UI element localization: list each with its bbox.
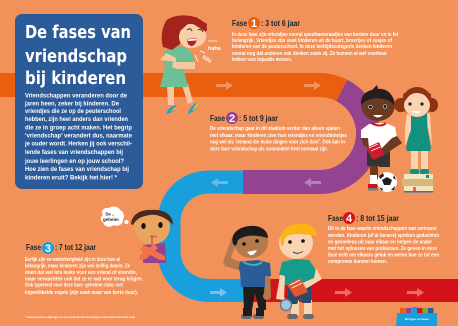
body: fase 4: worden. Kinderen (of al tieners) spreken gedachten (327, 233, 439, 239)
body: fase 3: Eerlijk zijn en wederkerigheid zijn in deze fase al (25, 257, 120, 263)
character: blond boy with magnifier (276, 224, 322, 319)
body: fase 1: vooral nog dat anderen ook denken zoals zij. Ze kunnen al wel voorkeur (232, 51, 388, 57)
title: bij kinderen (25, 68, 126, 89)
road segment: orange (0, 85, 342, 90)
arrow: blue road top (211, 178, 228, 187)
torso (143, 243, 166, 263)
body: fase 3: doen dat wel iets leuks voor een vriend of vriendin, (25, 270, 137, 276)
body: fase 4 (327, 226, 439, 265)
head (134, 210, 170, 244)
character: boy scratching head (223, 226, 271, 319)
title (25, 22, 131, 89)
logo basket (396, 313, 437, 326)
intro text (24, 94, 133, 181)
heading: fase 1: : 3 tot 6 jaar (261, 19, 300, 28)
thought bubble: geheim (103, 217, 119, 222)
heading: fase 3: 3 (45, 243, 51, 255)
shoes (287, 314, 298, 319)
legs (243, 285, 266, 310)
arms (405, 113, 432, 146)
intro text: ‘vriendschap’ verandert dus, naarmate (25, 134, 133, 140)
body: fase 1: In deze fase zijn vriendjes vooral speelkameraadjes van kortere duur en is lol (232, 32, 398, 38)
stack of books (402, 174, 433, 192)
dress (160, 46, 195, 87)
shoes (410, 169, 419, 174)
heading: fase 4: : 8 tot 15 jaar (356, 214, 399, 223)
heading: fase 3: Fase (26, 243, 41, 252)
heading: fase 1 (232, 17, 300, 30)
body: fase 4: met het oplossen van problemen. Ze geven in deze (328, 246, 437, 252)
phase 3 block (25, 242, 143, 296)
phase 2 block (210, 112, 347, 152)
pigtails (394, 98, 408, 112)
intro text: hebben, zijn heel anders dan vrienden (25, 117, 128, 123)
body: fase 4: fase echt om elkaars geluk en weten hoe ze tot een (328, 252, 439, 258)
thought bubble (101, 207, 128, 227)
arms (276, 268, 322, 300)
logo: product box (396, 307, 437, 326)
magnifier (280, 298, 292, 310)
heading: fase 2: : 5 tot 9 jaar (239, 114, 278, 123)
arrow: orange road 2 (304, 81, 321, 90)
footnote: * www.hoptoys.nl/jeugd-en-opvoeding/vriendschappen-bij-kinderen/onderzoek (25, 315, 135, 319)
shorts (367, 148, 390, 167)
arrow: purple road (304, 178, 321, 187)
logo: product box: Bergjes en fases (405, 317, 429, 321)
heading: fase 1: Fase (232, 19, 247, 28)
arrow: red road 1 (335, 288, 352, 297)
legs (411, 148, 418, 172)
heading: fase 4: 4 (346, 213, 353, 225)
heading: fase 3: : 7 tot 12 jaar (55, 243, 96, 252)
finger on lips (150, 235, 157, 244)
shoe (368, 184, 377, 190)
laugh text: haha (208, 46, 222, 52)
dress (406, 113, 431, 151)
intro text: kinderen eruit? Bekijk het hier! * (25, 175, 118, 181)
body: fase 2: met elkaar, maar kinderen zien hun vriendjes en vriendinnetjes (210, 133, 347, 139)
body: fase 2 (210, 126, 347, 152)
hair (131, 210, 173, 225)
legs (291, 300, 299, 316)
heading: fase 3 (26, 242, 96, 255)
head (234, 226, 268, 258)
body: fase 4: en gevoelens uit naar elkaar en helpen de ander (328, 240, 433, 246)
football (377, 172, 397, 192)
intro text: vriendjes die ze op de peuterschool (25, 109, 121, 115)
phase 4 block (327, 212, 439, 265)
laugh text (201, 46, 222, 65)
heading: fase 1: 1 (251, 18, 257, 30)
intro text: lende fases van vriendschappen bij (25, 150, 123, 156)
body: fase 4: Dit is de fase waarin vriendschappen wat serieuzer (328, 226, 438, 232)
title: De fases van (25, 22, 131, 43)
logo blocks (400, 307, 434, 317)
arrow: blue road bottom (210, 288, 227, 297)
intro text: Hoe zien de fases van vriendschap bij (25, 167, 129, 173)
book (287, 278, 308, 297)
body: fase 2: deze fase vriendschap als nutsmiddel heel normaal zijn. (210, 146, 328, 152)
arms (160, 53, 195, 69)
title: vriendschap (25, 46, 127, 67)
arms (139, 244, 165, 260)
body: fase 1: belangrijk. Vriendjes zijn vaak kinderen uit de buurt, broertjes of zusjes of (232, 38, 392, 44)
intro text: Vriendschappen veranderen door de (25, 94, 128, 100)
intro text: jaren heen, zeker bij kinderen. De (24, 102, 120, 108)
body: fase 3: Ook typerend voor deze fase: geheime clubs met (25, 282, 123, 288)
heading: fase 4: Fase (328, 214, 343, 223)
character: girl on books (394, 87, 438, 192)
arms (361, 136, 402, 157)
character: laughing girl (160, 15, 222, 114)
head (402, 87, 432, 117)
book (366, 142, 384, 160)
body: fase 3 (25, 257, 143, 296)
fringe (178, 17, 207, 33)
arrow: orange road 1 (216, 81, 233, 90)
hair back (162, 15, 207, 50)
body: fase 2: De vriendschap gaat in dit stadium verder dan alleen spelen (210, 126, 340, 132)
body: fase 1: hebben voor bepaalde mensen. (232, 57, 292, 63)
legs (167, 84, 193, 105)
shirt (361, 123, 397, 152)
road segment: blue (169, 182, 245, 290)
heading: fase 4 (328, 212, 399, 225)
face (179, 24, 206, 48)
body: fase 1 (232, 32, 398, 63)
shirt (279, 259, 318, 285)
body: fase 4: compromis kunnen komen. (328, 259, 387, 265)
arrow: red road 2 (407, 288, 424, 297)
body: fase 2: nog wel als ‘iemand die leuke dingen voor zich doet’. Ook kan in (210, 140, 345, 146)
intro text: die ze in groep acht maken. Het begrip (25, 126, 132, 132)
body: fase 1: kinderen van de peuterschool. In deze leeftijdscategorie denken kinderen (232, 44, 392, 50)
head (279, 227, 313, 259)
character: secretive boy (131, 210, 173, 263)
laugh text: hihi (201, 55, 213, 65)
road arrows (210, 81, 424, 297)
right arm (264, 272, 271, 295)
shoes (241, 314, 252, 319)
intro text: je ouder wordt. Herken jij ook verschil- (24, 142, 132, 148)
body: fase 3: maar verwachten ook dat ze er wat voor terug krijgen. (25, 276, 143, 282)
shirt (235, 260, 271, 287)
heading: fase 2: 2 (229, 113, 235, 125)
body: fase 3: ingewikkelde regels (zijn vaak maar van korte duur). (25, 290, 138, 296)
heading: fase 2: Fase (210, 114, 225, 123)
character: boy with ball (361, 85, 402, 192)
legs (370, 165, 378, 187)
road segment: purple (243, 90, 368, 182)
phase 1 block (232, 17, 398, 63)
road: winding path through four phases (0, 85, 458, 290)
thought bubble: Se .. (104, 212, 115, 216)
body: fase 3: belangrijk, maar kinderen zijn wel deillig daarin. Ze (25, 264, 130, 270)
road segment: red (240, 279, 458, 302)
raised arm (223, 237, 240, 270)
heading: fase 2 (210, 112, 278, 125)
mouth and eyes (187, 38, 197, 46)
intro text: jouw leerlingen en op jouw school? (24, 159, 124, 165)
head (361, 89, 395, 121)
eyes (141, 223, 146, 229)
jeans (288, 280, 311, 304)
panel: intro (15, 14, 143, 189)
shoes (166, 105, 178, 114)
